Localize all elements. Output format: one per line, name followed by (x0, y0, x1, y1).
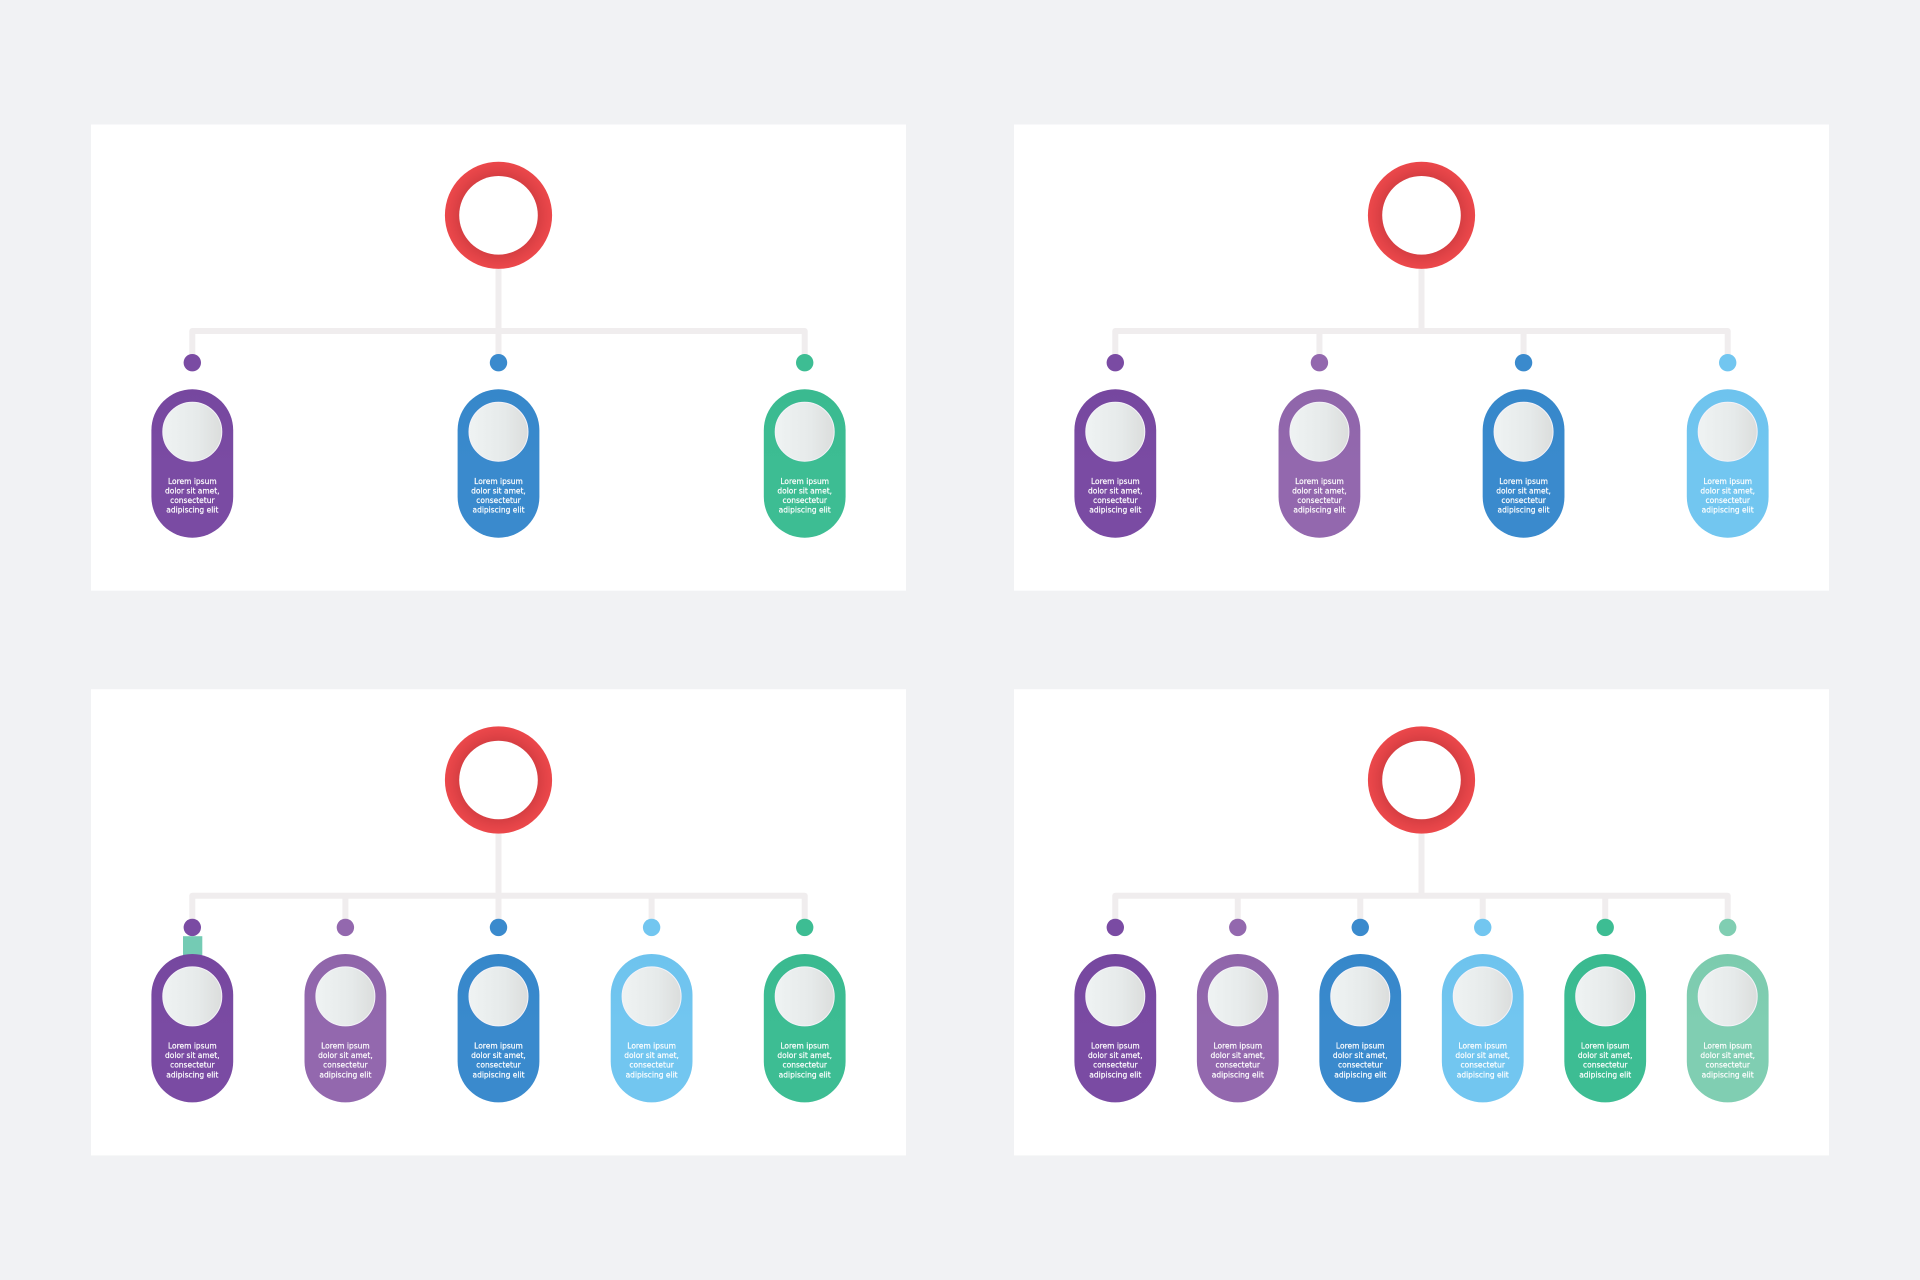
branch 4: light blue (1442, 896, 1524, 1102)
branch 5: green: Lorem ipsum (780, 1042, 829, 1050)
branch 2: light purple: consectetur (1297, 496, 1343, 505)
branch 2: light purple: adipiscing elit (319, 1070, 371, 1079)
branch 3: blue: adipiscing elit (472, 1070, 525, 1079)
panel: six branches (1014, 689, 1829, 1155)
branch 5: green: consectetur (782, 1061, 828, 1070)
branch 1: purple: Lorem ipsum (168, 477, 217, 486)
branch 4: light blue (1687, 331, 1769, 538)
branch 4: light blue: adipiscing elit (1457, 1070, 1509, 1079)
branch 3: blue: dolor sit amet, (1496, 486, 1551, 495)
branch 4: light blue: dolor sit amet, (1700, 486, 1755, 495)
branch 5: green: dolor sit amet, (777, 1051, 832, 1060)
branch 4: light blue: Lorem ipsum (1703, 477, 1752, 486)
branch 3: green: dolor sit amet, (777, 486, 832, 495)
branch 3: blue: adipiscing elit (1334, 1070, 1386, 1079)
branch 4: light blue: consectetur (1705, 496, 1751, 505)
branch 3: blue: dolor sit amet, (471, 1051, 526, 1060)
branch 2: light purple (304, 896, 386, 1102)
branch 2: light purple: dolor sit amet, (1292, 486, 1347, 495)
branch 3: green: adipiscing elit (779, 506, 831, 515)
branch 2: light purple: consectetur (1216, 1061, 1261, 1070)
branch 1: purple: Lorem ipsum (168, 1042, 217, 1050)
branch 3: green (764, 331, 846, 538)
branch 2: blue: adipiscing elit (472, 506, 525, 515)
branch 2: light purple (1279, 331, 1360, 538)
branch 1: purple: adipiscing elit (1089, 1070, 1141, 1079)
branch 5: green: Lorem ipsum (1581, 1042, 1630, 1050)
branch 5: green: adipiscing elit (1579, 1070, 1631, 1079)
branch 6: mint: adipiscing elit (1702, 1070, 1754, 1079)
branch 3: green: consectetur (782, 496, 828, 505)
branch 6: mint: dolor sit amet, (1700, 1051, 1755, 1060)
branch 2: blue (458, 331, 539, 538)
branch 1: purple: consectetur (170, 496, 215, 505)
branch 1: purple (1074, 896, 1156, 1102)
branch 2: light purple: Lorem ipsum (1213, 1042, 1262, 1050)
branch 3: blue (1319, 896, 1401, 1102)
branch 4: light blue (611, 896, 692, 1102)
branch 1: purple: adipiscing elit (1089, 506, 1141, 515)
root ring (445, 726, 552, 834)
branch 5: green (764, 896, 846, 1102)
branch 2: blue: dolor sit amet, (471, 486, 526, 495)
branch 4: light blue: dolor sit amet, (624, 1051, 679, 1060)
branch 2: light purple: Lorem ipsum (1295, 477, 1344, 486)
branch 3: blue (458, 896, 539, 1102)
branch 1: purple: Lorem ipsum (1091, 477, 1140, 486)
branch 5: green (1564, 896, 1646, 1102)
branch 4: light blue: Lorem ipsum (627, 1042, 676, 1050)
branch 1: purple: adipiscing elit (166, 1070, 218, 1079)
branch 1: purple: dolor sit amet, (165, 486, 220, 495)
branch 2: blue: Lorem ipsum (474, 477, 523, 486)
branch 2: light purple: adipiscing elit (1212, 1070, 1264, 1079)
branch 1: purple (151, 896, 233, 1102)
branch 5: green: dolor sit amet, (1578, 1051, 1633, 1060)
branch 2: light purple (1197, 896, 1279, 1102)
branch 1: purple: consectetur (170, 1061, 215, 1070)
panel: four branches (1014, 124, 1829, 591)
branch 4: light blue: adipiscing elit (1702, 506, 1754, 515)
branch 3: blue: Lorem ipsum (474, 1042, 523, 1050)
panel: five branches (91, 689, 906, 1155)
branch 5: green: adipiscing elit (779, 1070, 831, 1079)
branch 3: blue: dolor sit amet, (1333, 1051, 1388, 1060)
branch 2: light purple: dolor sit amet, (318, 1051, 373, 1060)
branch 3: blue: Lorem ipsum (1499, 477, 1548, 486)
branch 1: purple: dolor sit amet, (165, 1051, 220, 1060)
branch 1: purple: adipiscing elit (166, 506, 218, 515)
branch 6: mint (1687, 896, 1769, 1102)
branch 5: green: consectetur (1583, 1061, 1628, 1070)
branch 4: light blue: Lorem ipsum (1458, 1042, 1507, 1050)
branch 2: blue: consectetur (476, 496, 522, 505)
branch 1: purple (1074, 331, 1156, 538)
branch 2: light purple: consectetur (323, 1061, 369, 1070)
root ring (445, 162, 552, 269)
branch 4: light blue: consectetur (1461, 1061, 1506, 1070)
branch 1: purple: consectetur (1093, 496, 1138, 505)
branch 1: purple: consectetur (1093, 1061, 1138, 1070)
branch 3: blue (1483, 331, 1564, 538)
root ring (1368, 726, 1475, 834)
branch 3: blue: consectetur (1501, 496, 1547, 505)
branch 2: light purple: adipiscing elit (1293, 506, 1345, 515)
branch 4: light blue: adipiscing elit (626, 1070, 678, 1079)
branch 3: blue: consectetur (1338, 1061, 1383, 1070)
branch 1: purple: Lorem ipsum (1091, 1042, 1140, 1050)
branch 3: blue: adipiscing elit (1498, 506, 1550, 515)
stray mint square (183, 936, 202, 955)
branch 3: blue: Lorem ipsum (1336, 1042, 1385, 1050)
branch 4: light blue: dolor sit amet, (1455, 1051, 1510, 1060)
branch 3: green: Lorem ipsum (780, 477, 829, 486)
panel: three branches (91, 124, 906, 591)
branch 4: light blue: consectetur (629, 1061, 675, 1070)
branch 1: purple: dolor sit amet, (1088, 1051, 1143, 1060)
branch 2: light purple: dolor sit amet, (1210, 1051, 1265, 1060)
root ring (1368, 162, 1475, 269)
branch 1: purple (151, 331, 233, 538)
branch 6: mint: Lorem ipsum (1703, 1042, 1752, 1050)
branch 2: light purple: Lorem ipsum (321, 1042, 370, 1050)
branch 3: blue: consectetur (476, 1061, 522, 1070)
branch 1: purple: dolor sit amet, (1088, 486, 1143, 495)
branch 6: mint: consectetur (1705, 1061, 1751, 1070)
